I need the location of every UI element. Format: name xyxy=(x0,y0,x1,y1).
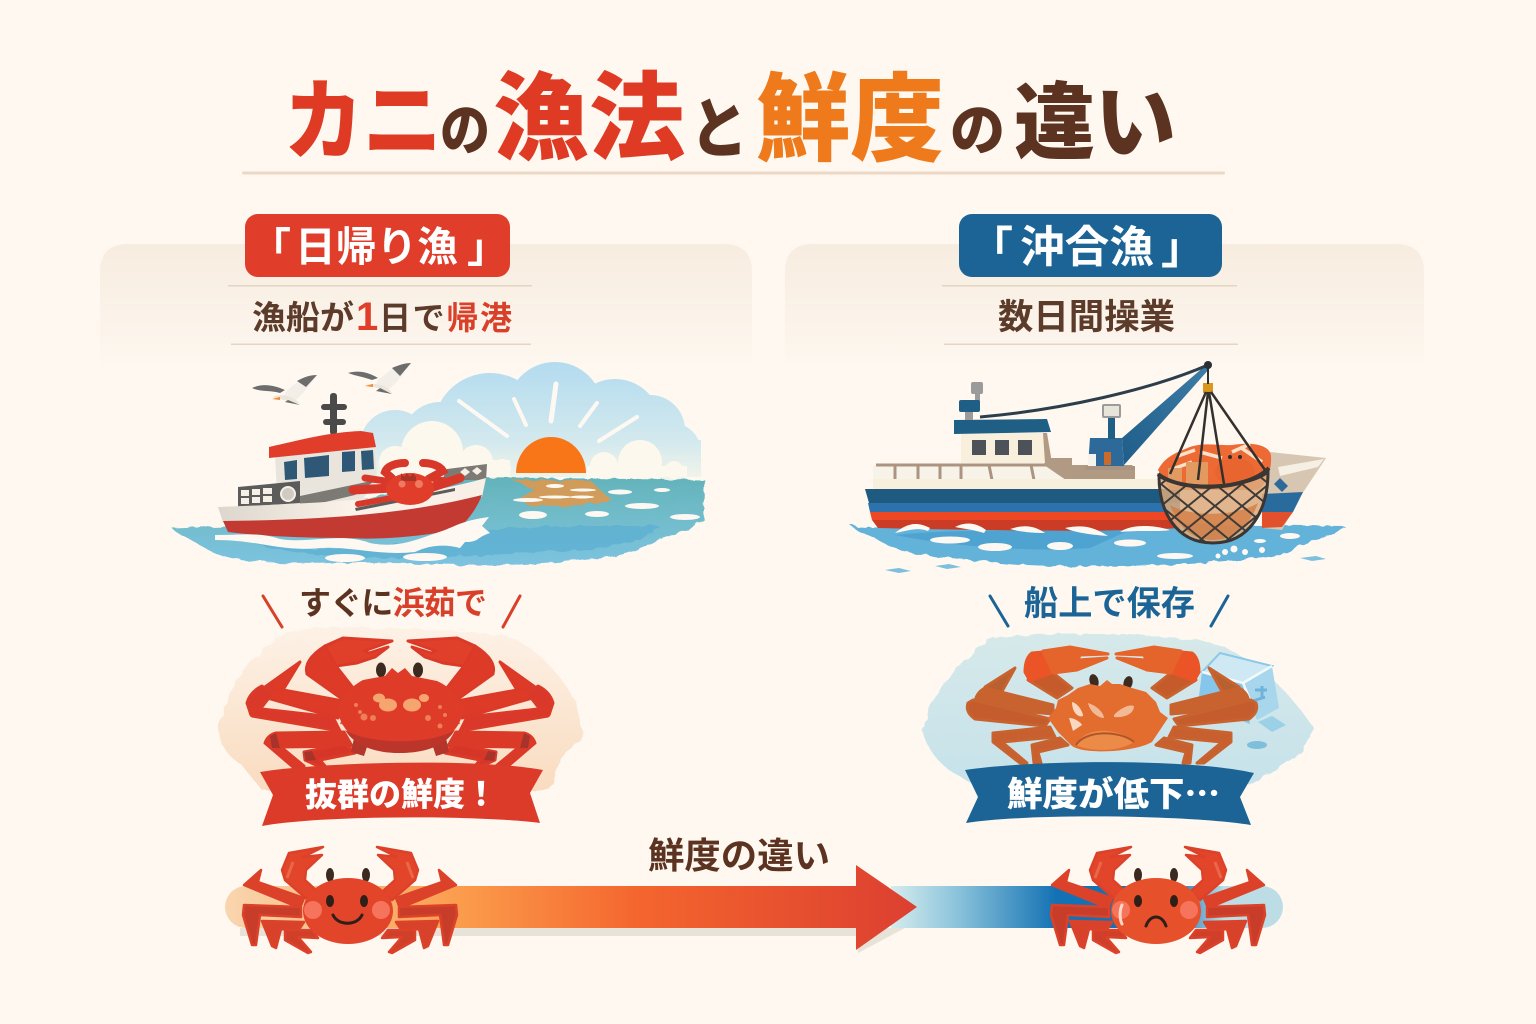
callout: すぐに浜茹で xyxy=(263,585,520,627)
happy face xyxy=(304,895,390,923)
hull stripes xyxy=(865,489,1303,531)
deeper water xyxy=(895,530,1130,549)
white clouds xyxy=(379,421,687,484)
cabin xyxy=(275,443,377,510)
deck structure xyxy=(1044,458,1135,480)
sea xyxy=(850,524,1345,566)
title: 違い xyxy=(1014,76,1176,170)
mast xyxy=(321,393,347,435)
seagulls xyxy=(252,363,411,405)
cloud and sky xyxy=(360,362,701,487)
blue background blob xyxy=(922,634,1313,785)
subheading: 漁船が1日で帰港: 漁船が xyxy=(252,299,354,336)
crab pale patches xyxy=(1069,702,1134,731)
label: 日帰り漁: 」 xyxy=(467,225,508,271)
title: の xyxy=(440,99,490,162)
label: 沖合漁: 「 xyxy=(969,224,1013,273)
crane cable xyxy=(980,365,1208,417)
fresh red crab xyxy=(247,638,553,767)
cabin roof xyxy=(954,419,1051,434)
crane boom xyxy=(1122,365,1210,465)
sad small crab xyxy=(1051,847,1265,953)
title: と xyxy=(690,92,748,166)
deck stripe xyxy=(355,488,455,511)
bar: blue stale side xyxy=(891,886,1283,928)
boat hull white xyxy=(218,478,486,522)
ice cube xyxy=(1198,653,1286,749)
banner: 抜群の鮮度! xyxy=(260,763,543,826)
foam at waterline xyxy=(215,517,490,553)
banner: 鮮度が低下…: 鮮度が低下… xyxy=(1007,767,1220,816)
sun xyxy=(516,437,586,473)
boat railing xyxy=(238,464,487,507)
net ropes xyxy=(1170,392,1265,484)
crane base xyxy=(1088,438,1124,466)
title underline xyxy=(242,172,1225,174)
subheading: 漁船が1日で帰港: 1 xyxy=(356,295,378,339)
title: 鮮度 xyxy=(756,67,944,174)
radar mast xyxy=(959,382,983,420)
crab shell xyxy=(338,668,463,753)
comparison bar shadow xyxy=(240,928,905,953)
crab shell xyxy=(1048,680,1168,751)
sad face xyxy=(1112,895,1198,926)
label: 沖合漁 xyxy=(959,214,1222,277)
callout: すぐに浜茹で: すぐに浜茹で xyxy=(299,585,487,621)
crab catch in net xyxy=(1158,444,1271,490)
hull deck strip xyxy=(873,479,1173,490)
banner: 抜群の鮮度!: 抜群の鮮度！ xyxy=(305,775,497,813)
bow xyxy=(1262,452,1326,530)
panel: left background xyxy=(100,244,752,372)
crab on deck xyxy=(353,463,460,505)
subheading: 漁船が1日で帰港: 日で帰港 xyxy=(379,300,512,336)
label: 日帰り漁 xyxy=(245,214,510,277)
panel: right background xyxy=(785,244,1424,372)
arrow: fresh to stale xyxy=(225,865,917,950)
happy small crab xyxy=(243,847,457,953)
label: 日帰り漁: 「 xyxy=(250,225,291,271)
sea xyxy=(172,477,705,565)
water glints xyxy=(325,484,700,562)
cabin windows xyxy=(284,450,374,480)
railing xyxy=(873,465,1065,480)
subheading: 漁船が1日で帰港 xyxy=(228,285,532,345)
subheading: 数日間操業: 数日間操業 xyxy=(998,298,1175,337)
banner: 鮮度が低下… xyxy=(965,762,1254,825)
less fresh orange crab xyxy=(967,647,1257,763)
cabin xyxy=(961,433,1050,463)
label: 鮮度の違い: 鮮度の違い xyxy=(648,835,830,876)
title xyxy=(284,66,1176,174)
illustration: offshore trawler xyxy=(850,361,1345,573)
label: 沖合漁: 」 xyxy=(1161,224,1205,273)
crab spots xyxy=(373,694,429,712)
title: カニ xyxy=(284,72,442,171)
waves xyxy=(895,524,1300,559)
boat hull red xyxy=(223,495,482,539)
net clasp xyxy=(1203,383,1213,393)
title: 漁法 xyxy=(493,66,685,173)
label: 沖合漁: 沖合漁 xyxy=(1020,223,1154,272)
callout: 船上で保存 xyxy=(990,585,1228,626)
title: の xyxy=(950,99,1005,162)
crab eyes xyxy=(376,662,423,678)
sun rays xyxy=(459,384,637,441)
deeper water xyxy=(245,525,660,558)
illustration: day boat at sunrise xyxy=(172,362,705,565)
sun reflection xyxy=(512,480,612,507)
crab eyes xyxy=(1088,673,1134,691)
label: 日帰り漁: 日帰り漁 xyxy=(295,224,458,270)
cabin roof xyxy=(269,431,376,458)
peach background blob xyxy=(218,628,583,790)
callout: 船上で保存: 船上で保存 xyxy=(1024,585,1195,623)
net bag xyxy=(1158,468,1269,543)
